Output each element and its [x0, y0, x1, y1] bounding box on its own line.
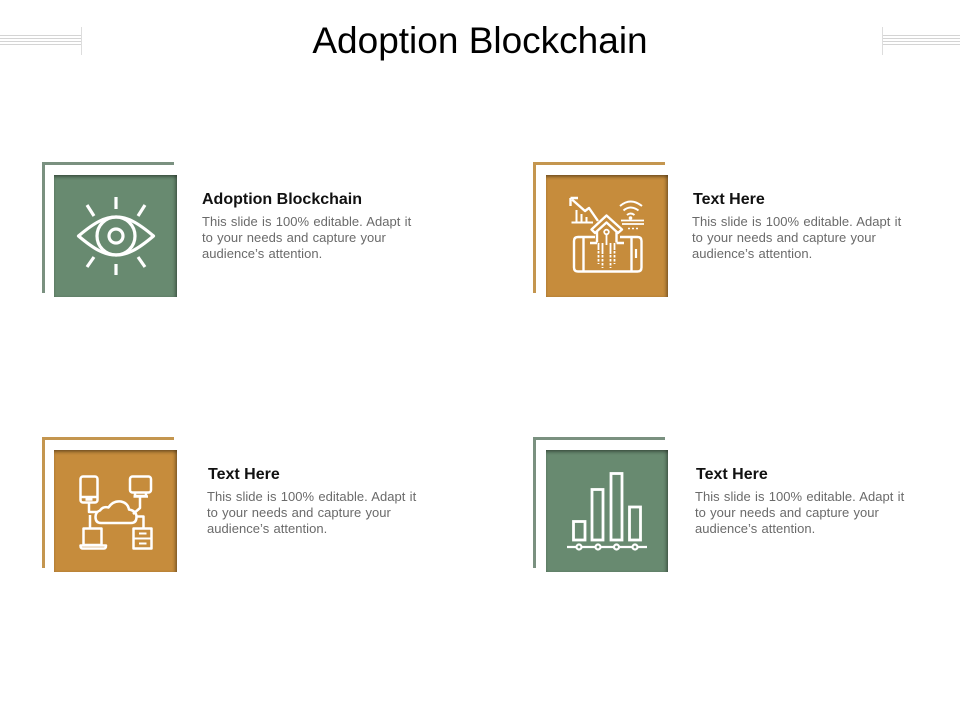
- bracket: top left vertical: [42, 162, 44, 293]
- heading: Text Here: Text Here: [693, 191, 765, 208]
- square: bottom right green: [546, 450, 668, 572]
- square: bottom left orange: [54, 450, 177, 572]
- text block: bottom left: [207, 466, 416, 536]
- body text: to your needs and capture your: [695, 504, 879, 520]
- body text: audience’s attention.: [202, 246, 322, 260]
- bracket: bottom right vertical: [533, 437, 536, 568]
- body text: [202, 214, 412, 260]
- body text: [692, 214, 902, 260]
- title: Adoption Blockchain: [312, 20, 648, 61]
- body text: [695, 488, 904, 536]
- square: top left green: [54, 175, 177, 297]
- body text: to your needs and capture your: [202, 230, 386, 244]
- body text: This slide is 100% editable. Adapt it: [695, 488, 904, 504]
- panel: bottom left card: [42, 437, 177, 572]
- body text: [207, 488, 416, 536]
- heading: Text Here: Text Here: [696, 466, 768, 483]
- bracket: top right horizontal: [533, 162, 665, 164]
- panel: top right card: [533, 162, 668, 297]
- bracket: top left horizontal: [42, 162, 174, 164]
- body text: This slide is 100% editable. Adapt it: [692, 214, 901, 228]
- text block: top left: [202, 191, 412, 260]
- body text: This slide is 100% editable. Adapt it: [207, 488, 416, 504]
- body text: audience’s attention.: [695, 520, 815, 536]
- text block: top right: [692, 191, 902, 260]
- body text: to your needs and capture your: [692, 230, 876, 244]
- panel: top left card: [42, 162, 177, 297]
- bracket: bottom left vertical: [42, 437, 44, 568]
- body text: audience’s attention.: [207, 520, 327, 536]
- bracket: bottom left horizontal: [42, 437, 174, 440]
- body text: This slide is 100% editable. Adapt it: [202, 214, 411, 228]
- text block: bottom right: [695, 466, 904, 536]
- bracket: top right vertical: [533, 162, 536, 293]
- heading: Text Here: Text Here: [208, 466, 280, 483]
- heading: Adoption Blockchain: Adoption Blockchain: [202, 191, 362, 208]
- body text: to your needs and capture your: [207, 504, 391, 520]
- panel: bottom right card: [533, 437, 668, 572]
- body text: audience’s attention.: [692, 246, 812, 260]
- bracket: bottom right horizontal: [533, 437, 665, 440]
- square: top right orange: [546, 175, 668, 297]
